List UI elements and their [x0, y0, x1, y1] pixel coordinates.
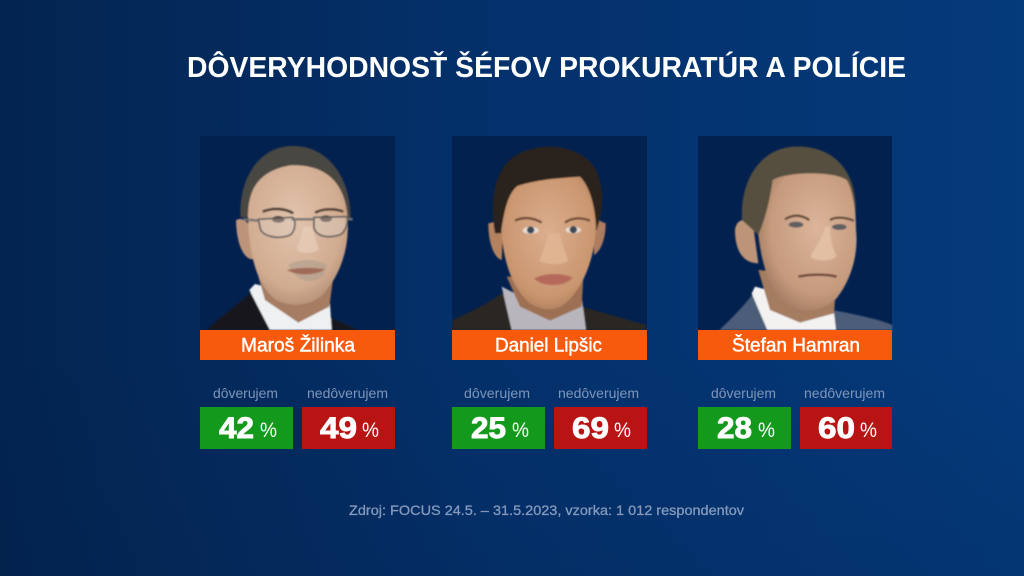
- stat: nedôverujem 69 %: [554, 385, 647, 449]
- panel: Maroš Žilinka: [200, 136, 395, 449]
- stat: nedôverujem 49 %: nedôverujem: [307, 385, 388, 401]
- stat: dôverujem 28 %: dôverujem: [711, 385, 776, 401]
- stat: nedôverujem 69 %: %: [614, 419, 631, 442]
- title: DÔVERYHODNOSŤ ŠÉFOV PROKURATÚR A POLÍCIE: [187, 51, 906, 84]
- name bar: Štefan Hamran: [698, 330, 892, 360]
- stat: dôverujem 28 %: [698, 385, 791, 449]
- stat: dôverujem 25 %: [452, 385, 545, 449]
- stat: nedôverujem 69 %: 69: [572, 412, 609, 445]
- stat: dôverujem 28 %: %: [758, 419, 775, 442]
- stat: nedôverujem 49 %: 49: [320, 412, 357, 445]
- stat: dôverujem 25 %: dôverujem: [464, 385, 530, 401]
- name bar: Štefan Hamran: Štefan Hamran: [732, 334, 860, 356]
- stat: dôverujem 25 %: 25: [471, 412, 506, 445]
- stat: nedôverujem 60 %: 60: [818, 412, 855, 445]
- portrait: Daniel Lipšic: [452, 136, 647, 330]
- stat: dôverujem 28 %: 28: [717, 412, 752, 445]
- stat: dôverujem 42 %: [200, 385, 293, 449]
- stat: dôverujem 42 %: dôverujem: [213, 385, 278, 401]
- name bar: Maroš Žilinka: Maroš Žilinka: [241, 334, 355, 356]
- stat: dôverujem 42 %: 42: [219, 412, 254, 445]
- name bar: Daniel Lipšic: [452, 330, 647, 360]
- source note: Zdroj: FOCUS 24.5. – 31.5.2023, vzorka: 1 012 respondentov: [349, 502, 744, 518]
- panel: Daniel Lipšic: [452, 136, 647, 449]
- name bar: Maroš Žilinka: [200, 330, 395, 360]
- stat: nedôverujem 60 %: [800, 385, 892, 449]
- name bar: Daniel Lipšic: Daniel Lipšic: [495, 336, 602, 356]
- panel: Štefan Hamran: [698, 136, 892, 449]
- stat: nedôverujem 49 %: %: [362, 419, 379, 442]
- stat: nedôverujem 60 %: nedôverujem: [804, 385, 885, 401]
- stat: nedôverujem 60 %: %: [860, 419, 877, 442]
- stat: dôverujem 42 %: %: [260, 419, 277, 442]
- stat: nedôverujem 69 %: nedôverujem: [558, 385, 639, 401]
- stat: nedôverujem 49 %: [302, 385, 395, 449]
- portrait: Maroš Žilinka: [200, 136, 395, 330]
- portrait: Štefan Hamran: [698, 136, 892, 330]
- stat: dôverujem 25 %: %: [512, 419, 529, 442]
